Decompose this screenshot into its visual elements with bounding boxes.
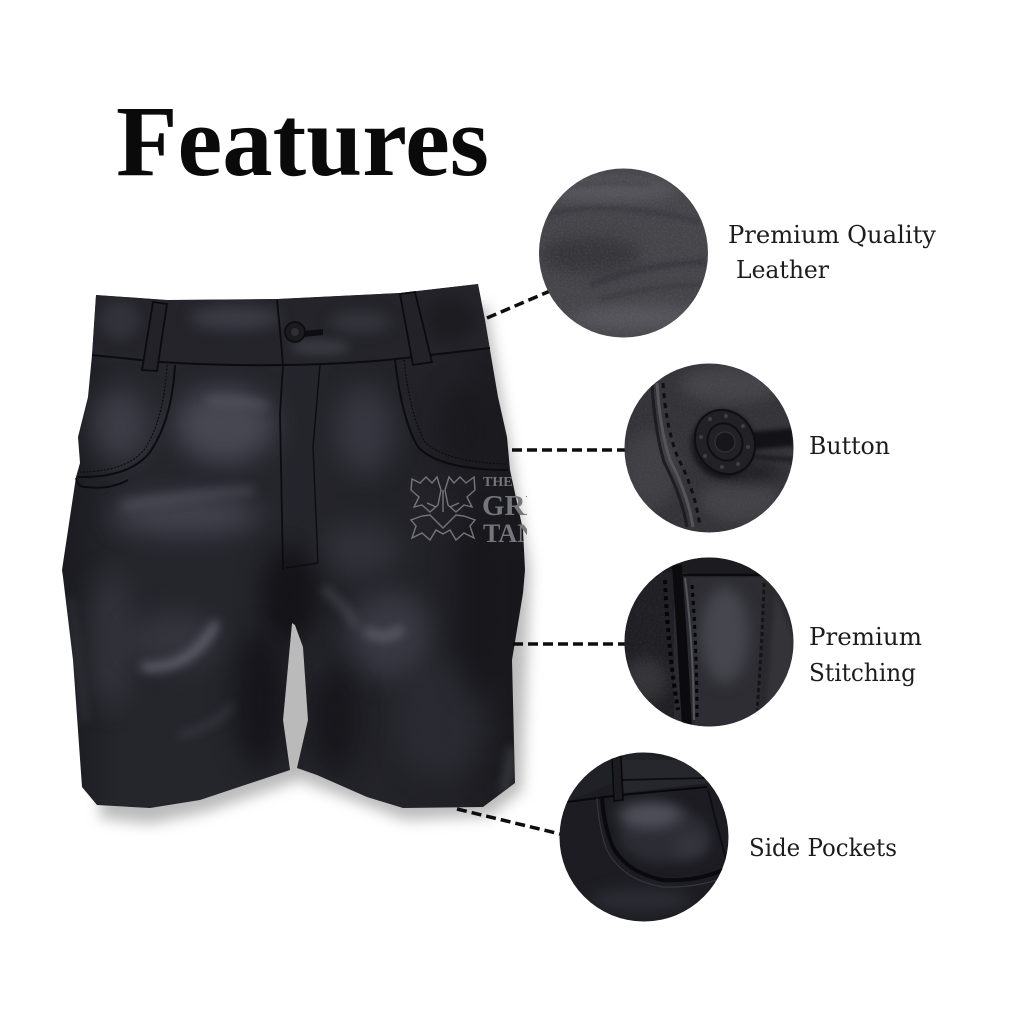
label: premium stitching: Stitching [809, 659, 916, 687]
detail circle: stitching [623, 557, 794, 727]
detail circle: button [622, 363, 794, 533]
label: premium quality leather: Leather [736, 256, 830, 284]
connector lines [457, 291, 625, 834]
watermark logo: TANNERY [483, 519, 609, 548]
detail circle: leather [539, 168, 710, 338]
label: premium stitching: Premium [809, 623, 922, 651]
waistband [92, 284, 490, 354]
watermark logo [410, 476, 527, 542]
sharp highlights [70, 400, 512, 790]
shorts photo [62, 284, 530, 824]
detail circle: side pockets [559, 752, 729, 922]
label: side pockets: Side Pockets [749, 834, 897, 862]
label: premium quality leather [728, 221, 936, 284]
broad lit zones [175, 387, 275, 463]
waist button [285, 322, 323, 342]
label: premium stitching [809, 623, 922, 687]
title: Features [116, 85, 489, 197]
dark folds [260, 545, 320, 645]
label: premium quality leather: Premium Quality [728, 221, 936, 249]
seams and pockets [76, 300, 508, 570]
label: button: Button [809, 432, 890, 460]
watermark logo: THE [483, 475, 513, 490]
soft drop shadow [100, 305, 530, 824]
watermark logo: GREEN [482, 490, 585, 522]
belt loops [142, 302, 167, 371]
